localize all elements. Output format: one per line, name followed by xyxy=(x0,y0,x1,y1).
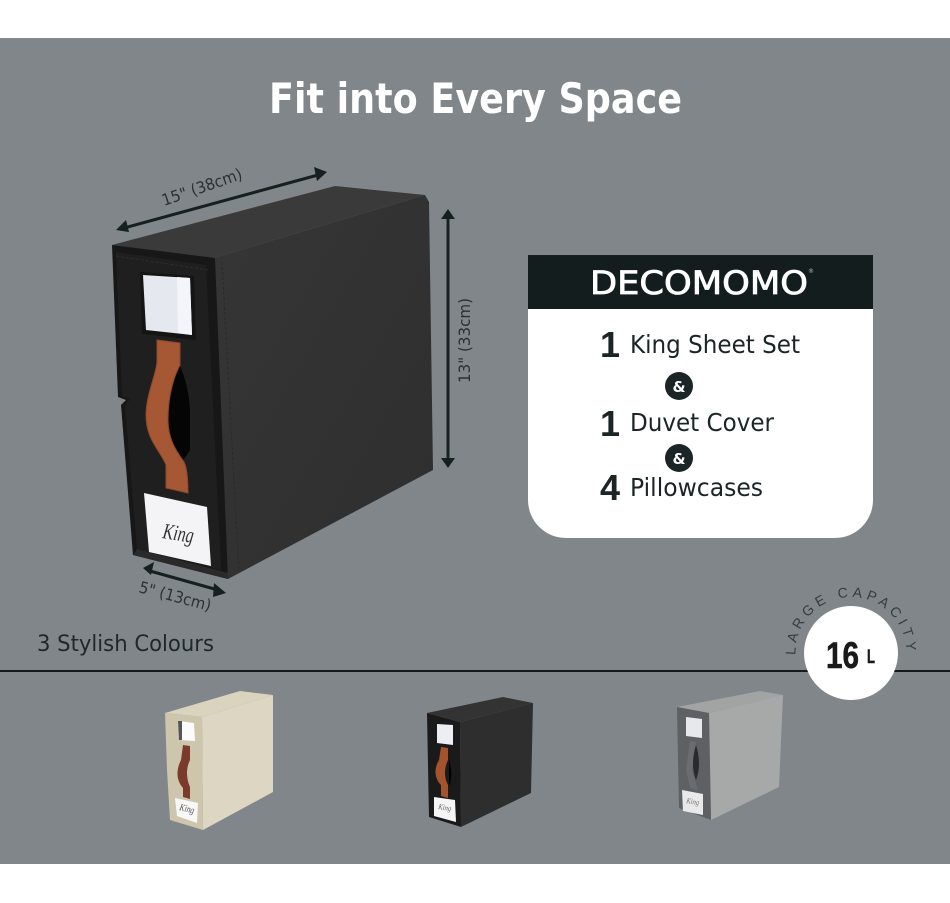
colours caption: 3 Stylish Colours xyxy=(37,632,214,657)
item 3 name: Pillowcases xyxy=(630,473,763,502)
item 2 name: Duvet Cover xyxy=(630,408,775,437)
brand logo: DECOMOMO xyxy=(590,264,808,302)
window showing white bedding xyxy=(143,275,192,335)
arrow: width 15 in xyxy=(116,167,327,232)
label: King: King xyxy=(685,796,700,807)
card body xyxy=(528,309,873,538)
window frame xyxy=(140,272,196,340)
handwritten King text: King xyxy=(161,518,196,548)
arrow: depth 5 in xyxy=(143,562,226,597)
ampersand badge 2 xyxy=(665,444,693,472)
capacity number: 16 xyxy=(826,635,859,676)
panel: contents card xyxy=(528,255,873,538)
product: grey box xyxy=(677,691,783,820)
label: King: King xyxy=(437,802,452,813)
registered mark: ® xyxy=(808,268,814,275)
name label xyxy=(144,493,211,566)
item 1 count: 1 xyxy=(600,324,620,365)
handle opening xyxy=(168,364,190,462)
label: 15 in: 15" (38cm) xyxy=(159,164,245,210)
label: 13 in: 13" (33cm) xyxy=(455,298,474,383)
label: King: King xyxy=(178,802,195,817)
leather handle xyxy=(146,340,188,493)
badge circle xyxy=(804,606,898,700)
curved caption: LARGE CAPACITY xyxy=(786,588,916,654)
arrow: height 13 in xyxy=(441,209,455,468)
ampersand badge 2: & xyxy=(672,450,686,468)
main storage box xyxy=(112,186,433,579)
item 3 count: 4 xyxy=(600,467,620,508)
item 2 count: 1 xyxy=(600,403,620,444)
ampersand badge 1: & xyxy=(672,378,686,396)
capacity unit: L xyxy=(867,647,875,668)
divider line xyxy=(0,670,950,672)
box front face xyxy=(112,245,228,579)
card header xyxy=(528,255,873,309)
product: cream box xyxy=(165,691,273,830)
box side face xyxy=(210,195,433,579)
box top face xyxy=(112,186,425,259)
ampersand badge 1 xyxy=(665,372,693,400)
product: black box xyxy=(427,697,533,827)
capacity badge xyxy=(786,588,916,700)
title: Fit into Every Space xyxy=(269,74,682,123)
label: 5 in: 5" (13cm) xyxy=(137,578,213,615)
item 1 name: King Sheet Set xyxy=(630,330,800,359)
